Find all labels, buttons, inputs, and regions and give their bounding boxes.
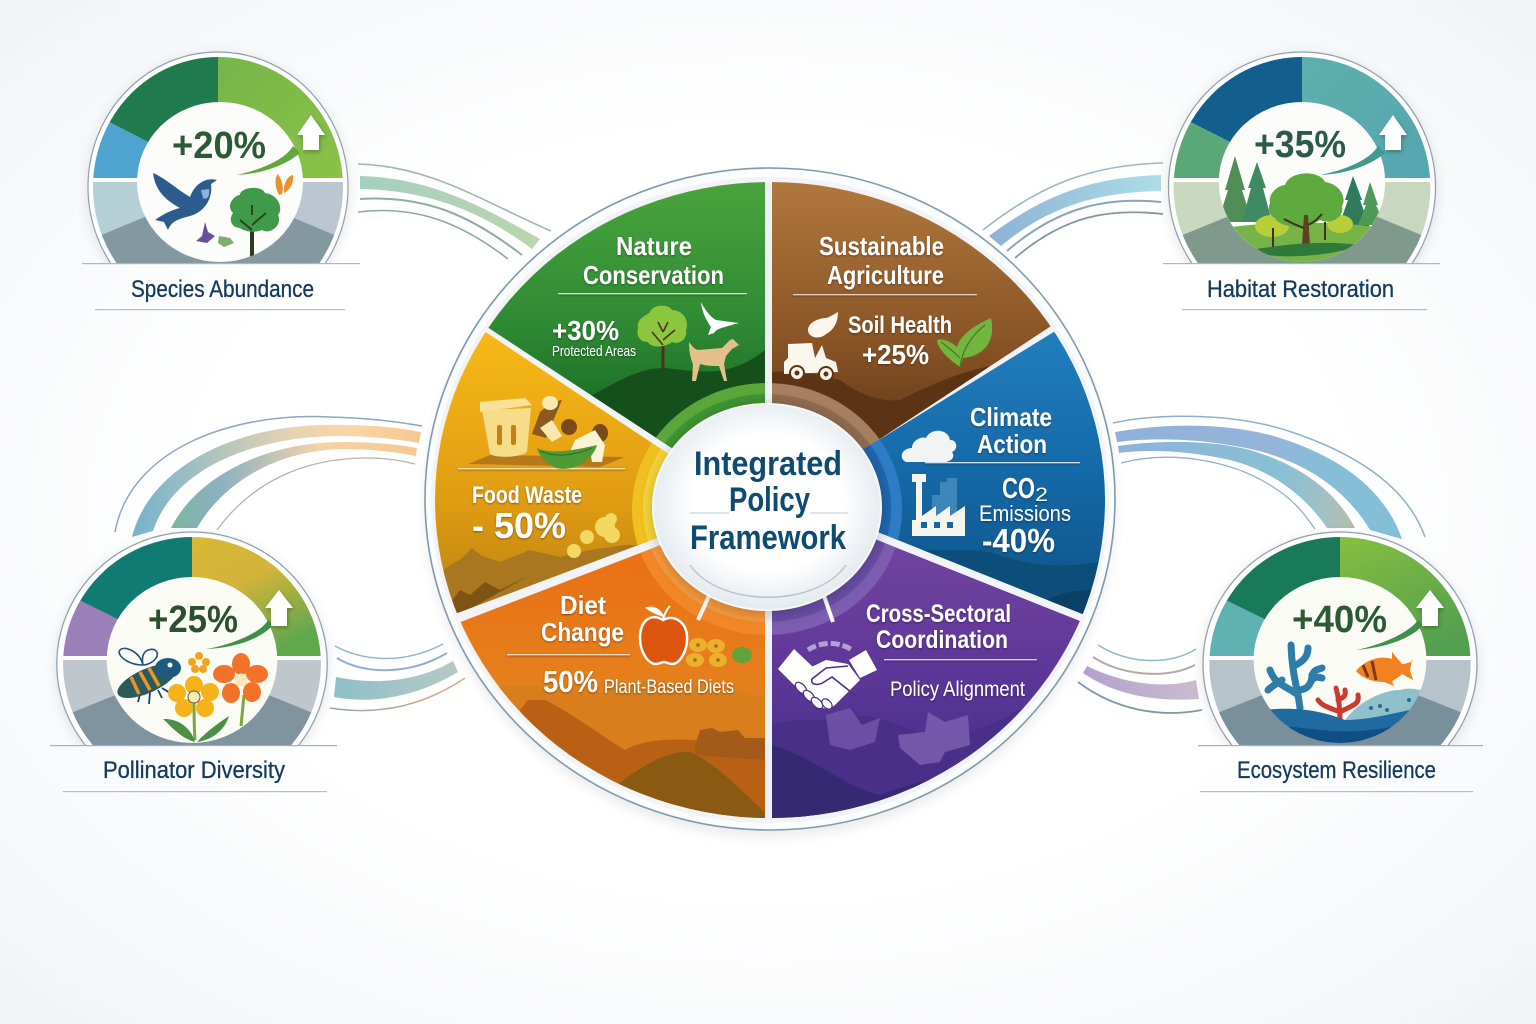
icon: bee and flowers — [113, 648, 268, 742]
policy wheel — [424, 167, 1116, 838]
panel: diet change — [460, 545, 765, 818]
sector text: nature conservation — [552, 231, 747, 360]
panel: climate action — [863, 332, 1105, 614]
icon: soil truck and leaf — [784, 312, 992, 381]
title: Integrated Policy Framework — [690, 445, 846, 557]
sector text: climate action: Action — [977, 429, 1047, 459]
connector: wheel to pollinator diversity — [330, 644, 465, 711]
badge: pollinator diversity — [46, 518, 338, 800]
base line — [82, 263, 360, 264]
sector text: climate action: 2 — [1035, 485, 1048, 506]
sector text: nature conservation: +30% — [552, 315, 619, 346]
title: Integrated Policy Framework: Framework — [690, 519, 846, 557]
central hub — [651, 404, 883, 616]
label: Species Abundance — [131, 276, 314, 303]
badge: ecosystem resilience — [1198, 531, 1483, 792]
dividers — [766, 184, 772, 818]
base line — [1163, 263, 1440, 264]
icon: handshake — [778, 643, 877, 711]
title: Integrated Policy Framework: Integrated — [694, 445, 842, 483]
sector text: diet change: Change — [541, 617, 624, 647]
icon: waste bin, scraps, beans — [468, 396, 625, 558]
badge: species abundance — [82, 51, 360, 310]
connector: species abundance to wheel — [358, 164, 551, 259]
sector text: food waste — [458, 468, 625, 546]
label: Habitat Restoration — [1207, 276, 1394, 303]
icon: apple, beans, leaf — [640, 606, 752, 667]
sector text: sustainable agriculture: +25% — [862, 339, 929, 370]
percentage: +40% — [1292, 599, 1387, 641]
sector text: cross-sectoral coordination — [866, 600, 1037, 701]
sector text: sustainable agriculture — [793, 231, 977, 370]
title: Integrated Policy Framework: Policy — [729, 481, 810, 519]
percentage: +35% — [1254, 124, 1346, 166]
sector text: nature conservation: Nature — [616, 231, 692, 261]
percentage: +20% — [172, 125, 266, 167]
sector text: sustainable agriculture: Agriculture — [827, 260, 944, 290]
sector text: food waste: - 50% — [472, 505, 566, 546]
sector text: climate action: CO — [1002, 473, 1035, 505]
panel: sustainable agriculture — [772, 182, 1050, 450]
gauge ring — [84, 51, 352, 263]
sector text: climate action: -40% — [982, 522, 1055, 559]
icon: forest — [1218, 156, 1385, 262]
trend arrow — [1320, 115, 1407, 175]
sector text: sustainable agriculture: Sustainable — [819, 231, 944, 261]
icon: tree, bird and deer — [637, 302, 739, 381]
sector text: food waste: Food Waste — [472, 482, 582, 509]
sector text: diet change: Diet — [560, 590, 606, 620]
sector text: climate action: Emissions — [979, 501, 1071, 526]
sector text: cross-sectoral coordination: Coordination — [876, 626, 1008, 654]
sector text: nature conservation: Protected Areas — [552, 344, 636, 360]
panel: food waste — [435, 332, 668, 614]
connector: habitat restoration to wheel — [983, 163, 1163, 258]
base line — [1198, 745, 1483, 746]
gauge ring — [54, 531, 330, 745]
connector: ecosystem resilience to wheel — [1113, 416, 1425, 539]
sector text: climate action — [925, 402, 1080, 559]
sector text: sustainable agriculture: Soil Health — [848, 312, 952, 339]
icon: coral reef and fish — [1264, 642, 1421, 743]
percentage: +25% — [148, 599, 238, 641]
sector text: diet change — [507, 590, 734, 699]
gauge ring — [1200, 531, 1480, 745]
sector text: diet change: 50% — [543, 664, 598, 699]
trend arrow — [1356, 590, 1444, 650]
icon: cloud and factory — [902, 431, 965, 536]
sector text: cross-sectoral coordination: Policy Alignment — [890, 678, 1025, 701]
icon: bird and tree — [153, 173, 293, 261]
base line — [50, 745, 337, 746]
trend arrow — [206, 590, 293, 649]
sector text: cross-sectoral coordination: Cross-Sectoral — [866, 600, 1011, 628]
label: Pollinator Diversity — [103, 757, 285, 784]
sector text: nature conservation: Conservation — [583, 260, 724, 290]
trend arrow — [236, 115, 325, 175]
label: Ecosystem Resilience — [1237, 757, 1436, 784]
panel: nature conservation — [488, 182, 765, 448]
panel: cross-sectoral coordination — [772, 540, 1080, 818]
gauge ring — [1165, 51, 1439, 263]
badge: habitat restoration — [1163, 51, 1440, 310]
connector: pollinator diversity to wheel — [115, 417, 422, 537]
sector text: diet change: Plant-Based Diets — [604, 677, 734, 698]
connector: wheel to ecosystem resilience — [1078, 645, 1202, 713]
sector text: climate action: Climate — [970, 402, 1052, 432]
